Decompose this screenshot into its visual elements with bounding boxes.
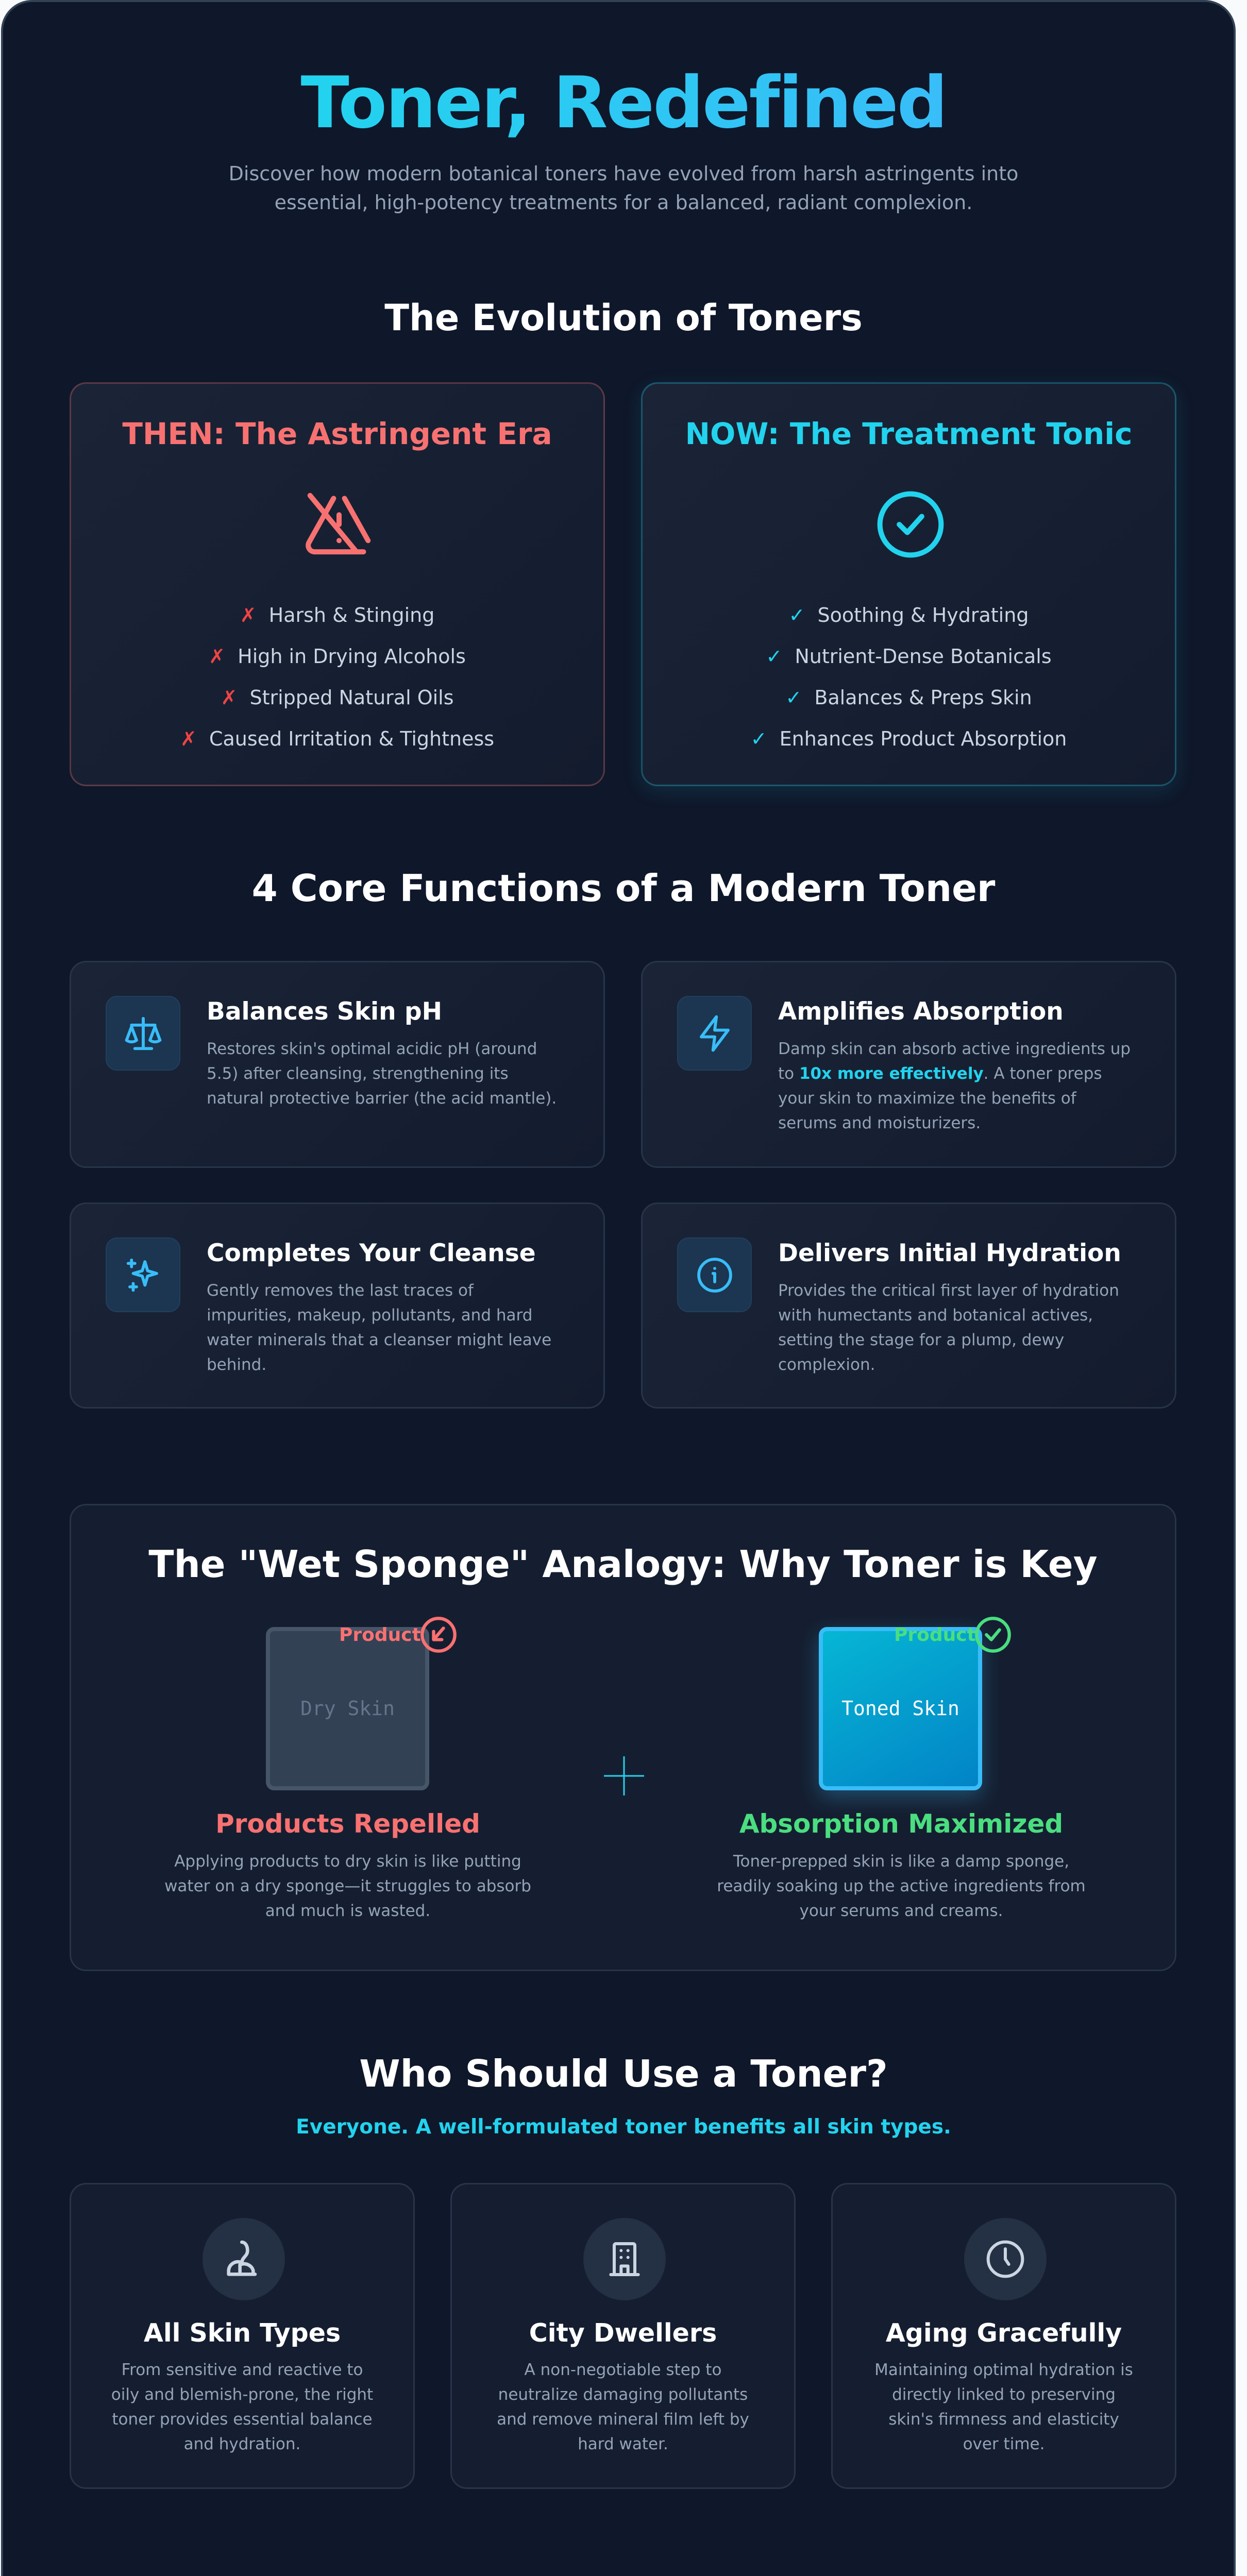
toned skin box: Toned Skin <box>841 1697 959 1720</box>
icon: check circle <box>877 492 944 557</box>
desc: over time. <box>963 2435 1044 2453</box>
desc: neutralize damaging pollutants <box>498 2385 748 2404</box>
heading: core functions: 4 Core Functions of a Modern Toner <box>252 867 995 910</box>
card: city dwellers <box>450 2183 796 2489</box>
product label red: Product <box>339 1624 421 1646</box>
icon: zap <box>677 996 752 1071</box>
now list: ✓ Balances & Preps Skin <box>785 686 1032 709</box>
now list <box>751 604 1067 750</box>
desc: and remove mineral film left by <box>497 2410 749 2429</box>
desc: oily and blemish-prone, the right <box>111 2385 373 2404</box>
desc <box>207 1281 551 1374</box>
panel: wet sponge <box>70 1504 1176 1971</box>
dry skin box <box>266 1627 429 1790</box>
title: Aging Gracefully <box>886 2318 1122 2348</box>
then list: ✗ Stripped Natural Oils <box>221 686 454 709</box>
desc: with humectants and botanical actives, <box>778 1306 1093 1325</box>
sponge title: The "Wet Sponge" Analogy: Why Toner is Key <box>148 1543 1098 1586</box>
heading: who: Who Should Use a Toner? <box>359 2052 888 2095</box>
desc: setting the stage for a plump, dewy <box>778 1331 1064 1349</box>
heading: evolution: The Evolution of Toners <box>384 297 863 339</box>
left caption <box>164 1809 531 1920</box>
desc: impurities, makeup, pollutants, and hard <box>207 1306 532 1325</box>
now list: ✓ Soothing & Hydrating <box>789 604 1029 626</box>
desc <box>874 2361 1133 2453</box>
right caption <box>717 1809 1086 1920</box>
card: cleanse <box>70 1202 605 1409</box>
product label green: Product <box>894 1624 976 1646</box>
icon: building <box>583 2218 666 2300</box>
desc <box>778 1281 1119 1374</box>
icon: scale <box>106 996 180 1071</box>
desc: toner provides essential balance <box>112 2410 373 2429</box>
toned skin box <box>819 1627 982 1790</box>
desc <box>497 2361 749 2453</box>
desc: and hydration. <box>184 2435 300 2453</box>
plus <box>604 1756 644 1795</box>
now list: ✓ Enhances Product Absorption <box>751 727 1067 750</box>
right caption: Toner-prepped skin is like a damp sponge, <box>733 1852 1069 1871</box>
desc: water minerals that a cleanser might leave <box>207 1331 551 1349</box>
desc: hard water. <box>578 2435 668 2453</box>
title: Balances Skin pH <box>207 997 442 1026</box>
icon: info <box>677 1238 752 1312</box>
desc: A non-negotiable step to <box>525 2361 721 2379</box>
panel: now <box>641 382 1176 786</box>
then list: ✗ High in Drying Alcohols <box>209 645 466 668</box>
desc <box>778 1040 1131 1132</box>
subtitle: essential, high-potency treatments for a balanced, radiant complexion. <box>275 191 972 214</box>
subtitle: Discover how modern botanical toners have evolved from harsh astringents into <box>229 162 1018 185</box>
title: All Skin Types <box>144 2318 341 2348</box>
desc: complexion. <box>778 1355 875 1374</box>
icon: warning off <box>306 493 371 554</box>
subtitle: everyone: Everyone. A well-formulated toner benefits all skin types. <box>296 2115 951 2139</box>
icon: absorbed <box>975 1617 1011 1653</box>
subtitle <box>229 162 1018 214</box>
desc: directly linked to preserving <box>892 2385 1116 2404</box>
card: aging <box>831 2183 1176 2489</box>
card: all skin types <box>70 2183 415 2489</box>
then list <box>180 604 494 750</box>
right caption: Absorption Maximized <box>739 1809 1063 1839</box>
desc: 5.5) after cleansing, strengthening its <box>207 1064 509 1083</box>
panel: then <box>70 382 605 786</box>
desc: your skin to maximize the benefits of <box>778 1089 1076 1108</box>
now title: NOW: The Treatment Tonic <box>685 416 1133 451</box>
desc: Damp skin can absorb active ingredients up <box>778 1040 1131 1058</box>
desc: behind. <box>207 1355 266 1374</box>
left caption: Products Repelled <box>215 1809 480 1839</box>
card: hydration <box>641 1202 1176 1409</box>
desc: Gently removes the last traces of <box>207 1281 474 1300</box>
icon: clock <box>964 2218 1047 2300</box>
then list: ✗ Caused Irritation & Tightness <box>180 727 494 750</box>
now list: ✓ Nutrient-Dense Botanicals <box>766 645 1052 668</box>
desc: From sensitive and reactive to <box>122 2361 363 2379</box>
left caption: and much is wasted. <box>265 1902 430 1920</box>
desc: serums and moisturizers. <box>778 1114 981 1132</box>
left caption: water on a dry sponge—it struggles to absorb <box>164 1877 531 1895</box>
title: City Dwellers <box>529 2318 717 2348</box>
left caption: Applying products to dry skin is like putting <box>174 1852 521 1871</box>
then title: THEN: The Astringent Era <box>122 416 552 451</box>
title: Toner, Redefined <box>301 61 946 144</box>
dry skin box: Dry Skin <box>300 1697 395 1720</box>
icon: sparkles <box>106 1238 180 1312</box>
desc: Maintaining optimal hydration is <box>874 2361 1133 2379</box>
desc <box>207 1040 557 1108</box>
title: Amplifies Absorption <box>778 997 1064 1026</box>
desc: Restores skin's optimal acidic pH (around <box>207 1040 537 1058</box>
right caption: your serums and creams. <box>800 1902 1003 1920</box>
right caption: readily soaking up the active ingredients from <box>717 1877 1086 1895</box>
desc: Provides the critical first layer of hydration <box>778 1281 1119 1300</box>
desc: skin's firmness and elasticity <box>888 2410 1119 2429</box>
title: Completes Your Cleanse <box>207 1239 536 1267</box>
icon: sprout <box>203 2218 285 2300</box>
card: ph <box>70 961 605 1168</box>
desc <box>111 2361 373 2453</box>
desc: to 10x more effectively. A toner preps <box>778 1064 1102 1083</box>
title: Delivers Initial Hydration <box>778 1239 1121 1267</box>
then list: ✗ Harsh & Stinging <box>240 604 434 626</box>
desc: natural protective barrier (the acid mantle). <box>207 1089 557 1108</box>
icon: repelled <box>420 1617 457 1653</box>
card: absorption <box>641 961 1176 1168</box>
